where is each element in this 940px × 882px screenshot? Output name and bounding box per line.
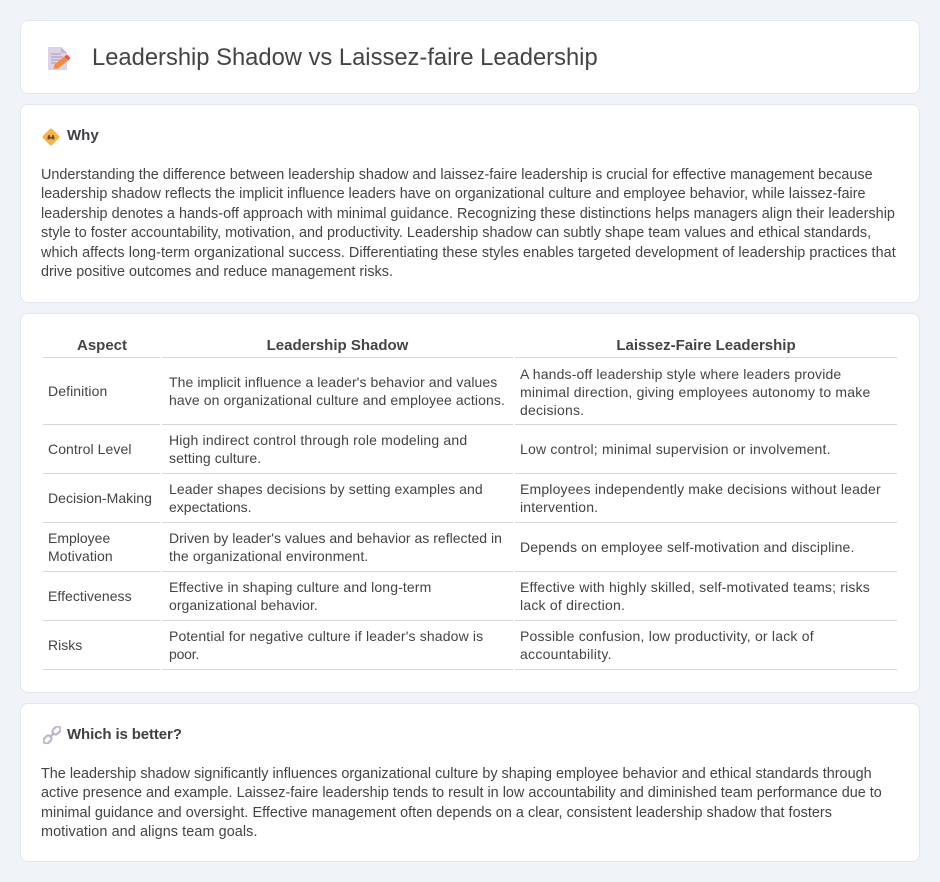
row: decision-making: Employees independently make decisions without leader [520,481,881,497]
icon: memo with pencil [48,47,70,70]
title: Leadership Shadow vs Laissez-faire Leadership [92,44,598,71]
row: employee motivation: Depends on employee self-motivation and discipline. [520,539,855,555]
row: definition: have on organizational culture and employee actions. [169,392,505,408]
row: risks: Risks [48,637,82,653]
row: employee motivation: Employee [48,530,110,546]
text block: which is better [41,766,882,840]
row: definition: decisions. [520,402,584,418]
row: definition: minimal direction, giving employees autonomy to make [520,384,870,400]
row: definition: The implicit influence a leader's behavior and values [169,374,497,390]
row: risks [48,628,814,662]
text block: why: style to foster accountability, motivation, and productivity. Leadership shadow can subtly shape team values and ethical standards, [41,225,871,241]
table header row: Laissez-Faire Leadership [616,337,796,354]
row: employee motivation [48,530,855,564]
text block: why: leadership denotes a hands-off approach with minimal guidance. Recognizing these distinctions helps managers align their leadership [41,206,895,222]
comparison table [43,337,897,670]
row: control level [48,432,831,466]
row: control level: Low control; minimal supervision or involvement. [520,441,831,457]
row: control level: setting culture. [169,450,261,466]
heading: why: Why [67,127,99,144]
row: decision-making [48,481,881,515]
row: definition: A hands-off leadership style where leaders provide [520,366,841,382]
text block: why [41,167,896,280]
row: effectiveness: lack of direction. [520,597,625,613]
icon: diamond warning sign [42,128,60,146]
text block: which is better: The leadership shadow significantly influences organizational culture by shaping employee behavior and ethical standards through [41,766,872,782]
row: employee motivation: Motivation [48,548,113,564]
text block: which is better: active presence and example. Laissez-faire leadership tends to result in low accountability and diminished team performance due to [41,785,882,801]
row: employee motivation: the organizational environment. [169,548,368,564]
panel: header [20,20,920,94]
row: risks: accountability. [520,646,612,662]
row: effectiveness: Effectiveness [48,588,132,604]
row: employee motivation: Driven by leader's values and behavior as reflected in [169,530,502,546]
text block: which is better: minimal guidance and oversight. Effective management often depends on a clear, consistent leadership shadow that fosters [41,805,832,821]
row: decision-making: expectations. [169,499,252,515]
row: effectiveness: organizational behavior. [169,597,318,613]
text block: which is better: motivation and aligns team goals. [41,824,258,840]
row: definition: Definition [48,383,107,399]
row: control level: High indirect control through role modeling and [169,432,467,448]
row: definition [48,366,870,418]
row: decision-making: Decision-Making [48,490,152,506]
row: risks: Possible confusion, low productivity, or lack of [520,628,814,644]
row: risks: poor. [169,646,199,662]
panel: comparison table [20,313,920,693]
row: effectiveness: Effective in shaping culture and long-term [169,579,431,595]
text block: why: leadership shadow reflects the implicit influence leaders have on organizational culture and employee behavior, while laissez-faire [41,186,865,202]
text block: why: Understanding the difference between leadership shadow and laissez-faire leadership is crucial for effective management because [41,167,873,183]
row: risks: Potential for negative culture if leader's shadow is [169,628,483,644]
row: decision-making: Leader shapes decisions by setting examples and [169,481,483,497]
row: effectiveness [48,579,870,613]
table header row: Leadership Shadow [267,337,408,354]
text block: why: drive positive outcomes and reduce management risks. [41,264,393,280]
row: control level: Control Level [48,441,132,457]
icon: link [43,726,61,744]
heading: which is better: Which is better? [67,726,182,743]
row: effectiveness: Effective with highly skilled, self-motivated teams; risks [520,579,870,595]
row: decision-making: intervention. [520,499,598,515]
table header row [77,337,796,354]
table header row: Aspect [77,337,127,354]
panel: which is better [20,703,920,862]
text block: why: which affects long-term organizational success. Differentiating these styles enables targeted development of leadership practices that [41,245,896,261]
panel: why [20,104,920,303]
